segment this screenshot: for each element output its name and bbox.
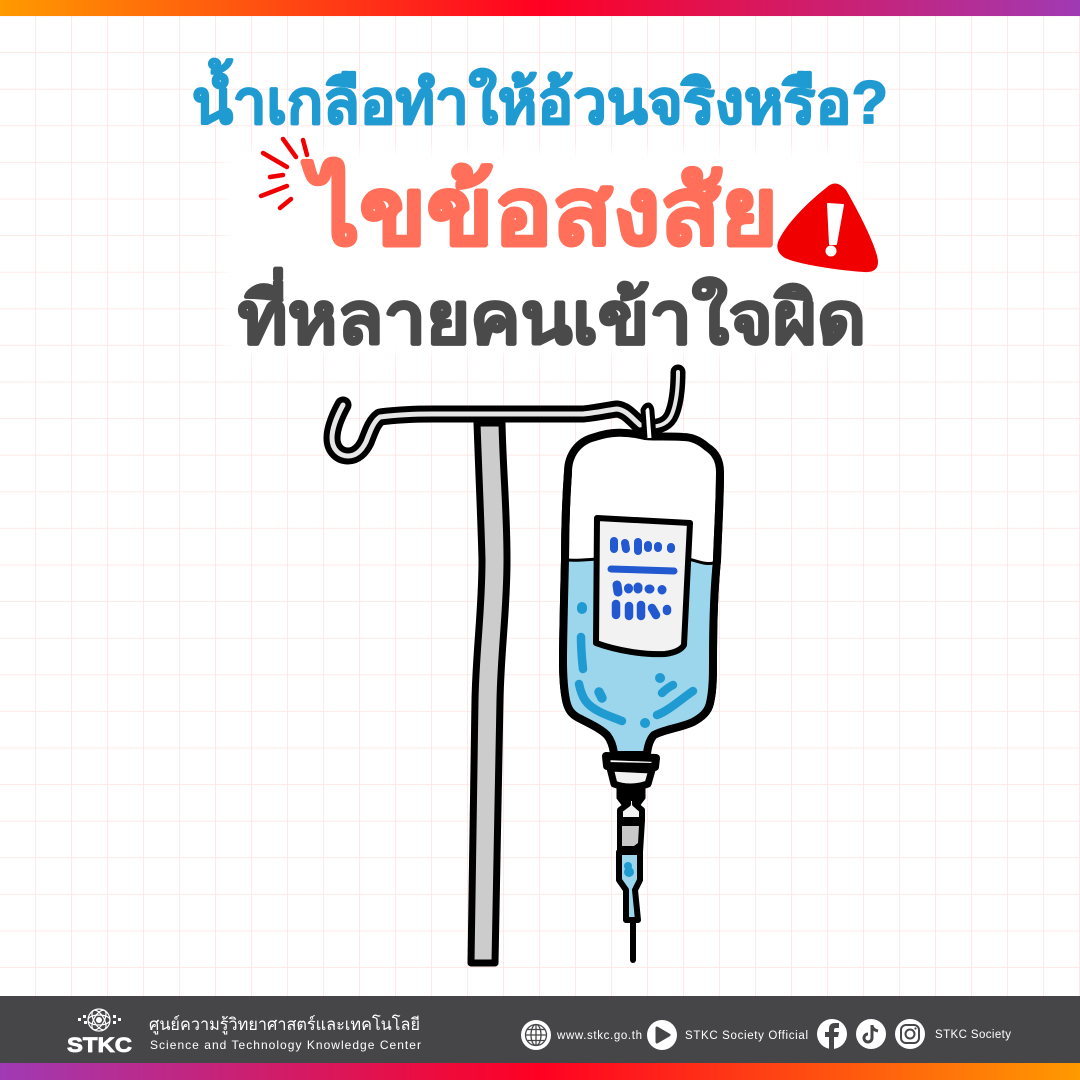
label text marks <box>611 541 674 616</box>
Instagram account name: STKC Society <box>935 1029 1011 1041</box>
IV pole <box>471 423 507 963</box>
organisation name in Thai: ศูนย์ความรู้วิทยาศาสตร์และเทคโนโลยี <box>149 1014 420 1035</box>
website address: www.stkc.go.th <box>556 1030 642 1042</box>
icon: warning triangle <box>777 183 878 272</box>
IV stand arm with hooks <box>332 372 678 456</box>
icon: instagram <box>895 1019 925 1049</box>
hanger tab <box>643 405 654 438</box>
icon: play button <box>647 1020 677 1050</box>
title line 1: น้ำเกลือทำให้อ้วนจริงหรือ? <box>192 58 888 136</box>
icon: tiktok <box>856 1019 886 1049</box>
STKC logo <box>67 1008 132 1057</box>
bottom gradient bar <box>0 1063 1080 1080</box>
YouTube channel name: STKC Society Official <box>685 1030 808 1042</box>
saline water <box>566 560 714 751</box>
saline bag body <box>563 433 720 753</box>
icon: facebook <box>817 1019 847 1049</box>
organisation name in English: Science and Technology Knowledge Center <box>150 1038 421 1052</box>
icon: globe <box>521 1020 551 1050</box>
bag label <box>596 518 690 654</box>
drip connector <box>606 756 656 960</box>
top gradient bar <box>0 0 1080 16</box>
bag outline over water <box>563 472 720 753</box>
footer bar <box>0 996 1080 1063</box>
title line 3: ที่หลายคนเข้าใจผิด <box>238 267 866 359</box>
STKC logo: STKC <box>67 1034 132 1057</box>
illustration: IV stand and saline bag <box>332 372 720 963</box>
title line 2: ไขข้อสงสัย <box>301 158 778 264</box>
water surface line <box>567 559 714 564</box>
water highlights <box>579 607 693 723</box>
icon: red emphasis burst <box>261 139 307 208</box>
